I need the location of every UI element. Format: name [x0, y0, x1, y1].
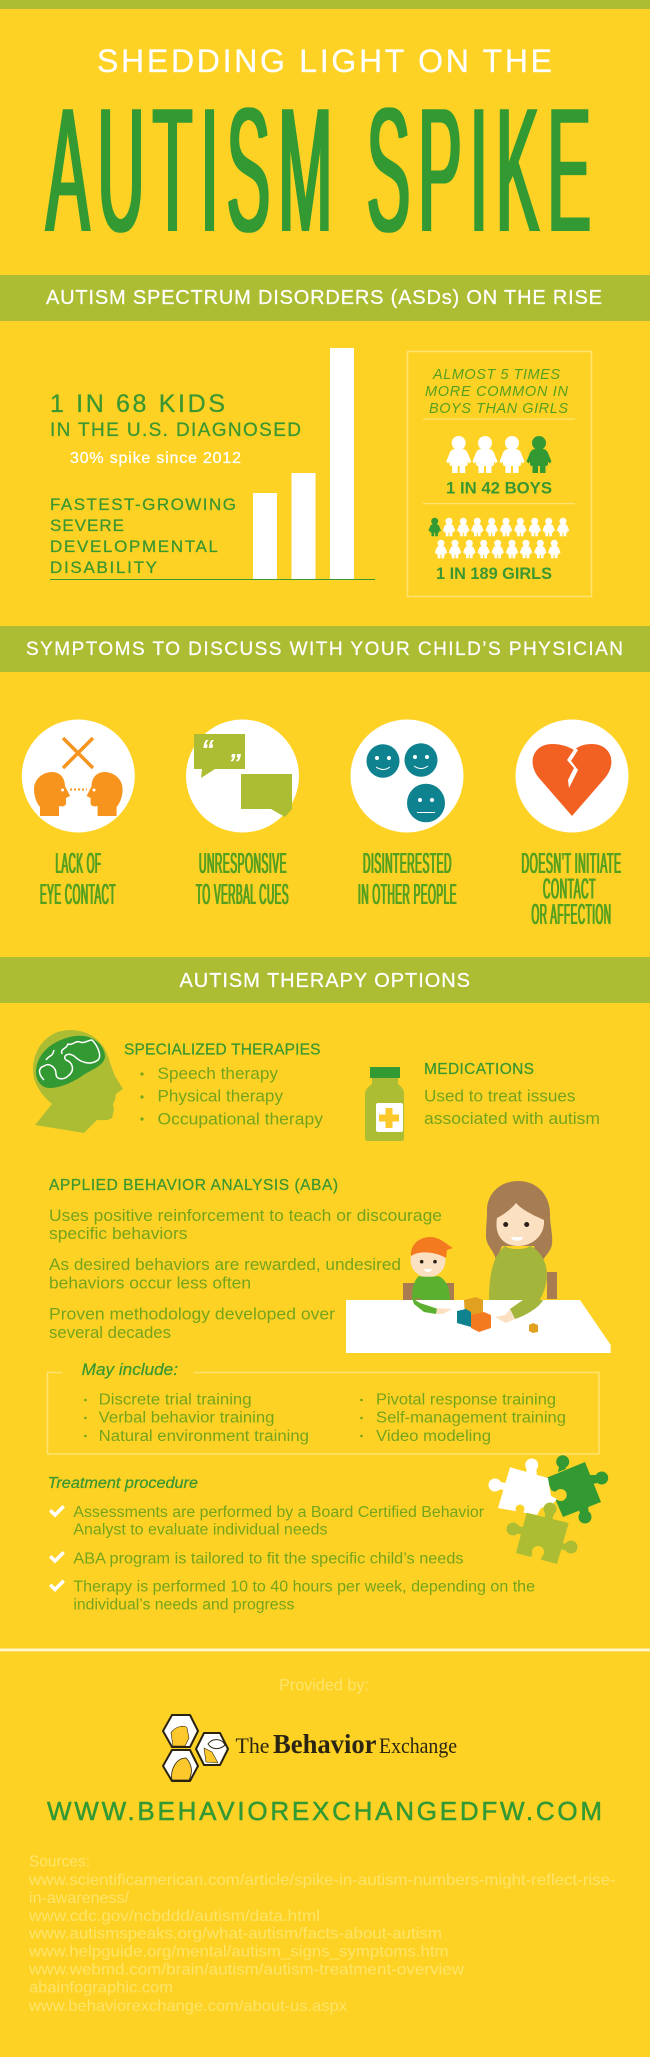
- section band: symptoms: [0, 626, 650, 672]
- girls stat: 1 IN 189 GIRLS: [436, 564, 552, 583]
- step 1: Assessments are performed by a Board Certified Behavior: [73, 1504, 484, 1521]
- list: Physical therapy: [158, 1088, 284, 1106]
- text: [424, 1088, 600, 1128]
- boys vs girls heading: BOYS THAN GIRLS: [429, 401, 568, 417]
- list: [140, 1065, 324, 1129]
- description: As desired behaviors are rewarded, undesired: [49, 1256, 401, 1274]
- icon: head with brain: [33, 1030, 123, 1133]
- section band: ASDs on the rise: [0, 275, 650, 321]
- list: right column: Pivotal response training: [376, 1391, 556, 1408]
- description: Proven methodology developed over: [49, 1305, 336, 1323]
- heading: May include:: [82, 1360, 178, 1379]
- icon: puzzle pieces: [488, 1455, 608, 1564]
- logo: The Behavior Exchange: [163, 1715, 457, 1781]
- label: [196, 848, 289, 911]
- sources: www.cdc.gov/ncbddd/autism/data.html: [28, 1908, 320, 1925]
- logo hexagons: [163, 1715, 228, 1781]
- list: Occupational therapy: [158, 1111, 324, 1129]
- title: kicker: SHEDDING LIGHT ON THE: [97, 43, 552, 79]
- step 1: [49, 1504, 484, 1539]
- section band: ASDs on the rise: AUTISM SPECTRUM DISORDERS (ASDs) ON THE RISE: [46, 287, 602, 309]
- text: associated with autism: [424, 1110, 600, 1128]
- step 3: Therapy is performed 10 to 40 hours per week, depending on the: [73, 1579, 535, 1596]
- description: [49, 1207, 442, 1342]
- sources: [28, 1854, 616, 2015]
- infographic canvas: TO VERBAL CUES: [196, 879, 289, 911]
- infographic canvas: IN OTHER PEOPLE: [358, 879, 457, 911]
- illustration: therapist and child at table: [346, 1181, 611, 1353]
- description: behaviors occur less often: [49, 1275, 251, 1293]
- panel: lack of eye contact: [22, 720, 135, 911]
- list: left column: Discrete trial training: [99, 1391, 252, 1408]
- icon: girls rows: [428, 518, 569, 558]
- panel: boys vs girls: [408, 352, 592, 596]
- panel: unresponsive: [186, 720, 299, 911]
- logo wordmark: Exchange: [379, 1733, 457, 1758]
- icon: boys row: [446, 436, 552, 473]
- top band: [0, 0, 650, 9]
- description: several decades: [49, 1324, 171, 1342]
- sources: www.helpguide.org/mental/autism_signs_symptoms.htm: [28, 1944, 449, 1961]
- logo wordmark: The: [236, 1733, 270, 1758]
- panel: lack of eye contact: LACK OF: [56, 848, 102, 880]
- sources: in-awareness/: [29, 1890, 130, 1907]
- panel: no contact or affection: [516, 720, 628, 931]
- description: specific behaviors: [49, 1225, 188, 1243]
- icon: speech bubbles: [194, 734, 292, 817]
- heading: APPLIED BEHAVIOR ANALYSIS (ABA): [49, 1177, 338, 1194]
- bar chart: [50, 348, 375, 580]
- boys vs girls heading: ALMOST 5 TIMES: [432, 367, 560, 383]
- list: right column: Video modeling: [376, 1428, 491, 1445]
- icon: speech bubbles: ”: [228, 748, 241, 778]
- sources: Sources:: [29, 1854, 90, 1871]
- footer: provided by: Provided by:: [279, 1676, 369, 1695]
- icon: speech bubbles: “: [201, 734, 214, 764]
- panel: specialized therapies: [33, 1030, 324, 1133]
- logo wordmark: [236, 1729, 457, 1759]
- icon: faces: [366, 743, 445, 822]
- text: Used to treat issues: [424, 1088, 576, 1106]
- section band: therapy options: [0, 957, 650, 1003]
- label: [522, 848, 622, 931]
- fastest-growing text: DISABILITY: [50, 558, 157, 577]
- label: [358, 848, 457, 911]
- fastest-growing text: [50, 495, 236, 577]
- sources: www.scientificamerican.com/article/spike-in-autism-numbers-might-reflect-rise-: [28, 1872, 616, 1889]
- spike note: 30% spike since 2012: [70, 450, 241, 467]
- fastest-growing text: DEVELOPMENTAL: [50, 537, 218, 556]
- infographic canvas: UNRESPONSIVE: [199, 848, 287, 880]
- section band: symptoms: SYMPTOMS TO DISCUSS WITH YOUR CHILD’S PHYSICIAN: [26, 639, 623, 660]
- label: [40, 848, 116, 911]
- list: right column: [360, 1391, 566, 1445]
- infographic canvas: DISINTERESTED: [363, 848, 452, 880]
- boys vs girls heading: MORE COMMON IN: [425, 384, 569, 400]
- stat headline: 1 IN 68 KIDS: [50, 390, 225, 418]
- list: left column: Natural environment training: [99, 1428, 309, 1445]
- icon: medicine bottle: [365, 1067, 404, 1141]
- heading: Treatment procedure: [48, 1475, 198, 1492]
- sources: www.behaviorexchange.com/about-us.aspx: [28, 1998, 347, 2015]
- heading: SPECIALIZED THERAPIES: [124, 1042, 320, 1058]
- sources: abainfographic.com: [29, 1980, 173, 1997]
- panel: 1 in 68 stat: [50, 348, 375, 580]
- heading: MEDICATIONS: [424, 1061, 534, 1078]
- stat subhead: IN THE U.S. DIAGNOSED: [50, 420, 301, 441]
- description: Uses positive reinforcement to teach or discourage: [49, 1207, 442, 1225]
- list: Speech therapy: [158, 1065, 279, 1083]
- icon: crossed out eye contact: [34, 738, 123, 816]
- step 2: ABA program is tailored to fit the specific child’s needs: [73, 1550, 464, 1567]
- sources: www.webmd.com/brain/autism/autism-treatment-overview: [28, 1962, 464, 1979]
- website url: WWW.BEHAVIOREXCHANGEDFW.COM: [47, 1796, 602, 1826]
- logo wordmark: Behavior: [273, 1729, 377, 1759]
- panel: medications: [365, 1061, 600, 1141]
- panel: disinterested: [350, 720, 464, 911]
- list: right column: Self-management training: [376, 1410, 566, 1427]
- fastest-growing text: SEVERE: [50, 516, 124, 535]
- icon: broken heart: [533, 744, 611, 816]
- sources: www.autismspeaks.org/what-autism/facts-about-autism: [28, 1926, 442, 1943]
- section band: therapy options: AUTISM THERAPY OPTIONS: [180, 970, 470, 992]
- step 3: individual’s needs and progress: [73, 1596, 295, 1613]
- list: left column: Verbal behavior training: [99, 1410, 274, 1427]
- panel: ABA: [49, 1177, 611, 1353]
- step 3: [49, 1579, 535, 1613]
- panel: treatment procedure: [48, 1475, 535, 1613]
- boys vs girls heading: [425, 367, 569, 417]
- infographic canvas: EYE CONTACT: [40, 879, 116, 911]
- panel: may include: [48, 1360, 599, 1454]
- boys stat: 1 IN 42 BOYS: [446, 478, 552, 498]
- fastest-growing text: FASTEST-GROWING: [50, 495, 236, 514]
- list: left column: [84, 1391, 309, 1445]
- step 1: Analyst to evaluate individual needs: [73, 1522, 328, 1539]
